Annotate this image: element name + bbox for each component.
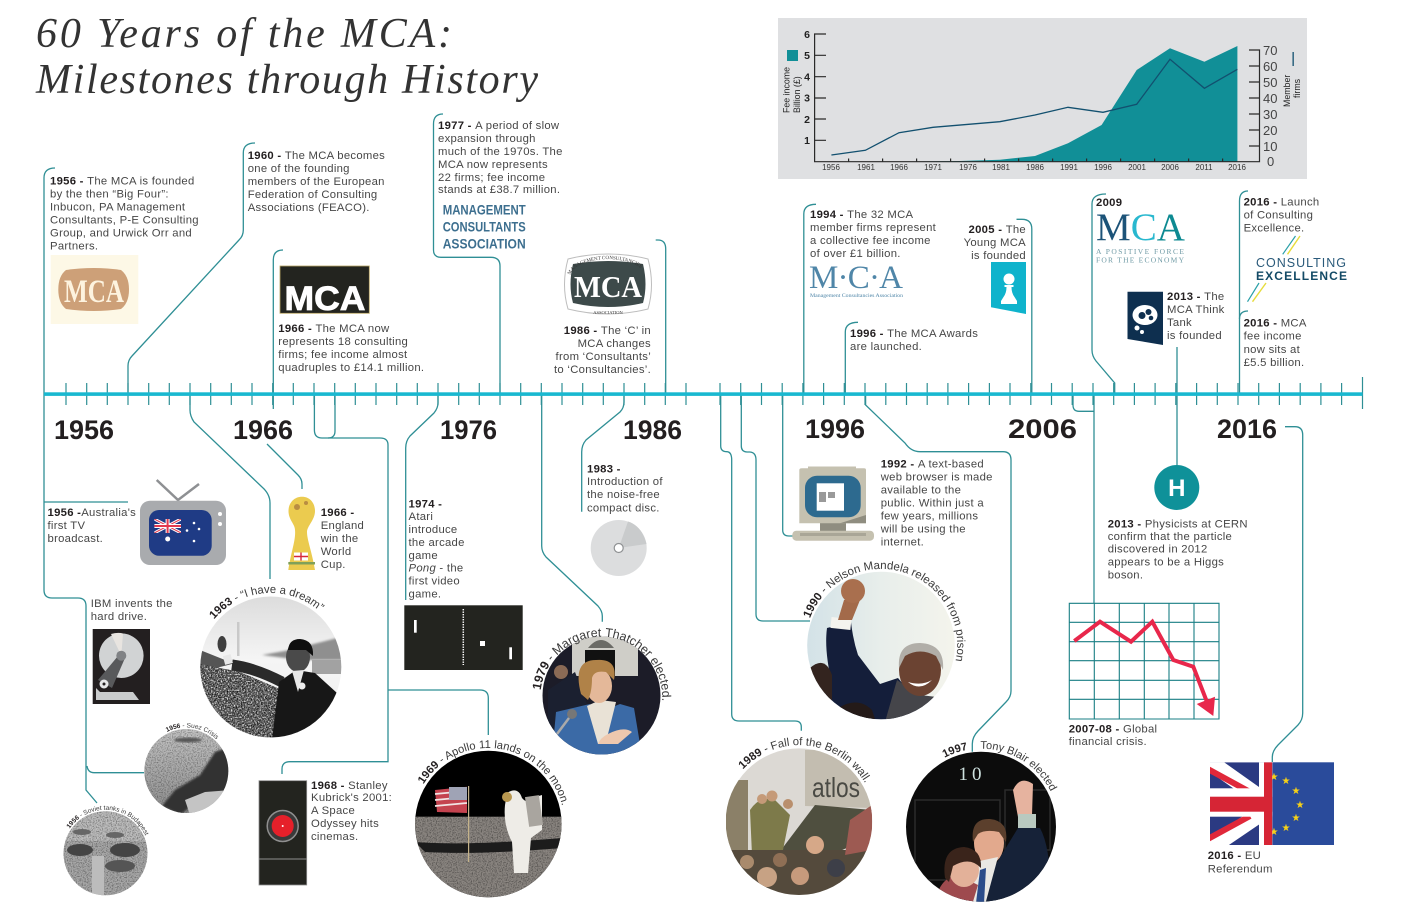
event: 1974 Pong: Pong: [408, 562, 436, 574]
milestone: 1966 MCA: firms; fee income almost: [278, 349, 408, 361]
chart: fee income and member firms: [778, 18, 1307, 179]
photo: 1990 Nelson Mandela: 1990 - Nelson Mandela released from prison: [804, 561, 966, 661]
logo: Management Consultants Association: CONSULTANTS: [443, 220, 526, 234]
milestone: 1986: MCA changes: [578, 338, 651, 350]
milestone: 2013 Think Tank: Tank: [1167, 317, 1192, 329]
event: 2013 Higgs boson: appears to be a Higgs: [1108, 557, 1224, 569]
photo: 1963 Martin Luther King: 1963 - “I have a dream”: [210, 586, 325, 619]
photo: 1989 Fall of the Berlin Wall: [726, 737, 872, 895]
logo: Management Consultants Association: [443, 202, 526, 252]
milestone: 1994: member firms represent: [810, 222, 937, 234]
year labels: 1971: [924, 163, 942, 172]
milestone: 1960 FEACO: Associations (FEACO).: [248, 202, 370, 214]
photo: 1990 Nelson Mandela: [804, 561, 966, 720]
year labels: 1956: [822, 163, 840, 172]
event: 1966 World Cup: World: [321, 546, 351, 558]
photo: 1956 Soviet tanks in Budapest: 1956 - Soviet tanks in Budapest: [66, 806, 149, 836]
icon: 1986 MCA badge: MANAGEMENT CONSULTANCIES: [567, 256, 642, 275]
milestone: 1956 MCA founded: Group, and Urwick Orr and: [50, 228, 192, 240]
milestone: 1986: The ‘C’ in: [601, 325, 651, 337]
milestone: 2013 Think Tank: 2013 -: [1167, 291, 1204, 303]
milestone: 2016 Consulting Excellence: Launch: [1281, 196, 1319, 208]
left axis labels: 1: [804, 135, 810, 147]
event: 2016 EU Referendum: Referendum: [1208, 863, 1273, 875]
milestone: 1956 MCA founded: Inbucon, PA Management: [50, 202, 186, 214]
milestone: 1956 MCA founded: 1956 -: [50, 176, 87, 188]
photo: 1956 Suez Crisis: 1956 - Suez Crisis: [166, 723, 218, 739]
left axis labels: [804, 29, 810, 147]
event: 1956 Australian TV: broadcast.: [48, 533, 103, 545]
decade labels: 2006: [1008, 414, 1077, 444]
decade labels: 1986: [623, 415, 682, 445]
photo: 1997 Tony Blair: 1997 Tony Blair elected: [942, 741, 1058, 791]
event: 2013 Higgs boson: 2013 -: [1108, 518, 1145, 530]
milestone: 1986: 1986 -: [564, 325, 601, 337]
legend: fee income: [782, 50, 802, 113]
milestone: 1966 MCA: [278, 266, 424, 374]
event: 1968 2001 A Space Odyssey: Kubrick's 2001:: [311, 792, 392, 804]
connector lines: [44, 114, 1303, 803]
event: 1974 Pong: first video: [408, 576, 460, 588]
icon: Higgs circle: [1154, 465, 1199, 510]
event: 1968 2001 A Space Odyssey: 1968 -: [311, 780, 348, 792]
icon: UK and EU flags: [1210, 762, 1334, 845]
year labels: 1976: [959, 163, 977, 172]
photo: 1997 Tony Blair: [906, 741, 1058, 902]
icon: chess pawn: [991, 262, 1026, 314]
year labels: 1986: [1026, 163, 1044, 172]
decade labels: 1996: [805, 414, 865, 444]
right axis labels: 60: [1263, 59, 1277, 74]
icon: UK and EU flags: ★: [1282, 823, 1291, 834]
event: 2007-08 financial crisis: financial crisis.: [1069, 736, 1147, 748]
event: 2007-08 financial crisis: 2007-08 -: [1069, 723, 1123, 735]
milestone: 1956 MCA founded: [50, 176, 199, 324]
milestone: 1977: 22 firms; fee income: [438, 172, 545, 184]
year labels: 1991: [1060, 163, 1078, 172]
icon: compact disc: [591, 520, 647, 576]
photo: 1969 Apollo 11: 1969 - Apollo 11 lands on the moon.: [418, 740, 566, 805]
fee income area: [899, 46, 1237, 162]
title: Milestones through History: [35, 57, 538, 103]
title: 60 Years of the MCA:: [36, 11, 452, 57]
photo: 1956 Soviet tanks in Budapest: [64, 806, 149, 896]
decade labels: [54, 414, 1277, 445]
chart: falling graph: [1069, 603, 1219, 719]
event: 1966 World Cup: England: [321, 520, 364, 532]
icon: hard drive: [93, 629, 150, 704]
milestone: 1960 FEACO: one of the founding: [248, 163, 350, 175]
icon: television with Australian flag: [140, 480, 226, 565]
event: 1974 Pong: [404, 498, 523, 670]
right axis labels: 30: [1263, 107, 1277, 122]
event: 1992 web browser: few years, millions: [881, 510, 978, 522]
legend: member firms: firms: [1292, 78, 1302, 98]
event: 1983 compact disc: compact disc.: [587, 502, 660, 514]
decade labels: 2016: [1217, 414, 1277, 444]
milestone: 1966 MCA: 1966 -: [278, 323, 315, 335]
milestone: 1994: The 32 MCA: [847, 209, 914, 221]
event: 1974 Pong: - the: [436, 562, 463, 574]
photo: 1989 Fall of the Berlin Wall: atlos: [812, 772, 860, 803]
event: 1992 web browser: internet.: [881, 536, 924, 548]
logo: MCA positive force: A POSITIVE FORCE: [1096, 247, 1184, 256]
timeline axis: [44, 377, 1362, 409]
event: 1974 Pong: Atari: [408, 511, 433, 523]
milestone: 2016 fee income: now sits at: [1244, 344, 1301, 356]
right axis labels: 70: [1263, 43, 1277, 58]
event: 1992 web browser: will be using the: [880, 523, 966, 535]
icon: Higgs circle: H: [1168, 475, 1185, 502]
milestone: 2016 Consulting Excellence: [1244, 196, 1347, 302]
logo: Management Consultants Association: MANAGEMENT: [443, 202, 526, 218]
milestone: 1986: to ‘Consultancies’.: [554, 364, 651, 376]
event: 1966 World Cup: 1966 -: [321, 507, 354, 519]
event: 2013 Higgs boson: discovered in 2012: [1108, 543, 1208, 555]
icon: 1956 MCA logo: [51, 255, 138, 324]
event: 1968 2001 A Space Odyssey: Stanley: [348, 780, 388, 792]
milestone: 2005 Young MCA: The: [1006, 224, 1026, 236]
photo: 1969 Apollo 11: [415, 740, 566, 898]
legend: fee income: Fee income: [782, 67, 792, 113]
right axis labels: 40: [1263, 91, 1277, 106]
milestone: 1956 MCA founded: Consultants, P-E Consulting: [50, 214, 199, 226]
decade labels: 1966: [233, 415, 293, 445]
event: 1966 World Cup: Cup.: [321, 559, 346, 571]
logo: MCA positive force: M: [1096, 206, 1131, 249]
year labels: 1981: [992, 163, 1010, 172]
event: 1956 Australian TV: [48, 480, 226, 565]
milestone: 1960 FEACO: 1960 -: [248, 150, 285, 162]
milestone: 1996 awards: 1996 -: [850, 328, 887, 340]
event: 1956 Australian TV: first TV: [48, 520, 85, 532]
event: 1956 Australian TV: 1956 -: [48, 507, 81, 519]
milestone: 1994: a collective fee income: [810, 235, 931, 247]
milestone: 1996 awards: The MCA Awards: [887, 328, 978, 340]
milestone: 1994: [809, 209, 937, 299]
photo: 1989 Fall of the Berlin Wall: 1989 - Fall of the Berlin wall.: [738, 737, 870, 782]
milestone: 1960 FEACO: members of the European: [248, 176, 385, 188]
icon: computer: [792, 466, 874, 541]
legend: fee income: Billion (£): [792, 76, 802, 113]
photo: 1997 Tony Blair: 10: [958, 764, 986, 785]
milestone: 2005 Young MCA: is founded: [971, 250, 1026, 262]
milestone: 2005 Young MCA: 2005 -: [969, 224, 1006, 236]
logo: Consulting Excellence: CONSULTING: [1256, 256, 1346, 270]
event: IBM hard drive: IBM invents the: [91, 598, 173, 610]
event: 1968 2001 A Space Odyssey: cinemas.: [311, 831, 358, 843]
milestone: 1977: [438, 120, 563, 252]
icon: 1986 MCA badge: MCA: [574, 269, 643, 304]
logo: M.C.A: M·C·A: [809, 260, 903, 296]
milestone: 2016 fee income: £5.5 billion.: [1244, 357, 1304, 369]
event: IBM hard drive: [91, 598, 173, 704]
event: 1983 compact disc: the noise-free: [587, 489, 660, 501]
milestone: 1977: much of the 1970s. The: [438, 146, 563, 158]
event: 1956 Australian TV: Australia's: [81, 507, 136, 519]
logo: MCA positive force: CA: [1131, 206, 1185, 249]
milestone: 2016 fee income: 2016 -: [1244, 318, 1281, 330]
event: 1974 Pong: the arcade: [408, 537, 465, 549]
milestone: 2005 Young MCA: [964, 224, 1026, 314]
milestone: 1977: MCA now represents: [438, 159, 548, 171]
decade labels: 1956: [54, 415, 114, 445]
logo: Consulting Excellence: EXCELLENCE: [1256, 269, 1347, 283]
photo: 1979 Margaret Thatcher: [532, 628, 672, 754]
milestone: 2013 Think Tank: The: [1204, 291, 1224, 303]
milestone: 1956 MCA founded: by the then “Big Four”:: [50, 188, 169, 200]
icon: thought bubble: [1128, 292, 1163, 345]
logo: Management Consultants Association: ASSOCIATION: [443, 236, 526, 252]
icon: 1956 MCA logo: MCA: [64, 274, 124, 310]
milestone: 1994: 1994 -: [810, 209, 847, 221]
event: 1974 Pong: game.: [408, 588, 441, 600]
right axis labels: 20: [1263, 123, 1277, 138]
icon: UK and EU flags: ★: [1292, 813, 1301, 824]
left axis labels: 4: [804, 72, 810, 84]
event: 1992 web browser: available to the: [881, 484, 961, 496]
year labels: 2011: [1195, 163, 1213, 172]
event: 1968 2001 A Space Odyssey: A Space: [311, 805, 355, 817]
year labels: 2001: [1128, 163, 1146, 172]
milestone: 1960 FEACO: Federation of Consulting: [248, 189, 378, 201]
event: IBM hard drive: hard drive.: [91, 611, 147, 623]
milestone: 1956 MCA founded: The MCA is founded: [87, 176, 195, 188]
icon: UK and EU flags: ★: [1296, 800, 1305, 811]
legend: member firms: [1282, 52, 1302, 107]
milestone: 2013 Think Tank: MCA Think: [1167, 304, 1225, 316]
event: 2016 EU Referendum: [1208, 762, 1334, 872]
icon: UK and EU flags: ★: [1282, 776, 1291, 787]
right axis labels: 10: [1263, 139, 1277, 154]
milestone: 2013 Think Tank: is founded: [1167, 330, 1222, 342]
logo: M.C.A: Management Consultancies Association: [810, 293, 903, 299]
milestone: 1977: expansion through: [438, 133, 536, 145]
event: 2013 Higgs boson: confirm that the particle: [1108, 531, 1232, 543]
event: 2013 Higgs boson: Physicists at CERN: [1145, 518, 1248, 530]
milestone: 1966 MCA: represents 18 consulting: [278, 336, 408, 348]
member firms line: [831, 59, 1237, 155]
milestone: 2016 Consulting Excellence: 2016 -: [1244, 196, 1281, 208]
photo: 1956 Suez Crisis: [144, 723, 228, 813]
chart axes: [815, 34, 1260, 162]
right axis labels: 0: [1267, 154, 1274, 169]
milestone: 1977: A period of slow: [475, 120, 560, 132]
milestone: 1977: 1977 -: [438, 120, 475, 132]
left axis labels: 2: [804, 114, 810, 126]
event: 1992 web browser: A text-based: [918, 458, 984, 470]
year labels: [822, 163, 1246, 172]
event: 2013 Higgs boson: [1108, 465, 1248, 581]
event: 1974 Pong: introduce: [408, 524, 458, 536]
year labels: 1961: [857, 163, 875, 172]
event: 2016 EU Referendum: 2016 -: [1208, 850, 1245, 862]
event: 1983 compact disc: Introduction of: [587, 476, 663, 488]
event: 2016 EU Referendum: EU: [1245, 850, 1261, 862]
event: 2013 Higgs boson: boson.: [1108, 569, 1143, 581]
event: 1983 compact disc: 1983 -: [587, 463, 621, 475]
event: 1966 World Cup: win the: [320, 533, 358, 545]
icon: 1986 MCA badge: ASSOCIATION: [593, 310, 623, 315]
event: 2007-08 financial crisis: [1069, 603, 1219, 748]
logo: MCA positive force: [1096, 206, 1185, 264]
event: 1983 compact disc: [587, 463, 663, 576]
event: 1966 World Cup: [288, 497, 364, 571]
event: 1992 web browser: [792, 458, 993, 548]
legend: member firms: Member: [1282, 75, 1292, 107]
milestone: 2016 fee income: MCA: [1281, 318, 1307, 330]
event: 1992 web browser: web browser is made: [880, 471, 993, 483]
event: 1974 Pong: 1974 -: [408, 498, 442, 510]
milestone: 1986: [554, 254, 652, 376]
event: 1974 Pong: game: [408, 550, 438, 562]
left axis labels: 6: [804, 29, 810, 41]
title: [35, 11, 538, 103]
milestone: 1994: of over £1 billion.: [810, 248, 901, 260]
milestone: 2013 Think Tank: [1128, 291, 1225, 345]
logo: Consulting Excellence: [1248, 236, 1347, 302]
decade labels: 1976: [440, 415, 497, 445]
photo: 1963 Martin Luther King: [200, 586, 342, 738]
left axis labels: 5: [804, 50, 810, 62]
icon: Pong screen: [404, 605, 523, 670]
icon: 1966 MCA logo: MCA: [284, 280, 366, 318]
milestone: 1956 MCA founded: Partners.: [50, 240, 98, 252]
milestone: 1986: from ‘Consultants’: [556, 351, 651, 363]
icon: 1986 MCA badge: [564, 254, 652, 315]
right axis labels: [1263, 43, 1277, 169]
left axis labels: 3: [804, 92, 810, 104]
milestone: 2016 fee income: fee income: [1244, 330, 1302, 342]
year labels: 2016: [1228, 163, 1246, 172]
milestone: 2009: [1096, 197, 1185, 264]
milestone: 2016 Consulting Excellence: of Consulting: [1244, 210, 1313, 222]
year labels: 2006: [1161, 163, 1179, 172]
milestone: 1977: stands at £38.7 million.: [438, 184, 560, 196]
event: 1992 web browser: public. Within just a: [881, 497, 984, 509]
icon: HAL 9000: [259, 781, 307, 885]
icon: UK and EU flags: ★: [1270, 827, 1279, 838]
milestone: 1966 MCA: The MCA now: [315, 323, 390, 335]
milestone: 1960 FEACO: The MCA becomes: [285, 150, 385, 162]
icon: UK and EU flags: ★: [1270, 772, 1279, 783]
icon: World Cup trophy: [288, 497, 315, 570]
photo: 1979 Margaret Thatcher: 1979 - Margaret Thatcher elected.: [532, 628, 672, 700]
icon: 1966 MCA logo: [280, 266, 369, 318]
milestone: 1966 MCA: quadruples to £14.1 million.: [278, 362, 424, 374]
event: 1992 web browser: 1992 -: [881, 458, 918, 470]
event: 1968 2001 A Space Odyssey: Odyssey hits: [311, 818, 379, 830]
milestone: 2005 Young MCA: Young MCA: [964, 237, 1026, 249]
year labels: 1966: [890, 163, 908, 172]
milestone: 1996 awards: are launched.: [850, 341, 922, 353]
event: 1968 2001 A Space Odyssey: [259, 780, 392, 885]
icon: UK and EU flags: ★: [1292, 786, 1301, 797]
logo: MCA positive force: FOR THE ECONOMY: [1096, 256, 1185, 264]
milestone: 2009: 2009: [1096, 197, 1122, 209]
event: 2007-08 financial crisis: Global: [1123, 723, 1157, 735]
right axis labels: 50: [1263, 75, 1277, 90]
milestone: 2016 Consulting Excellence: Excellence.: [1244, 222, 1304, 234]
year labels: 1996: [1094, 163, 1112, 172]
